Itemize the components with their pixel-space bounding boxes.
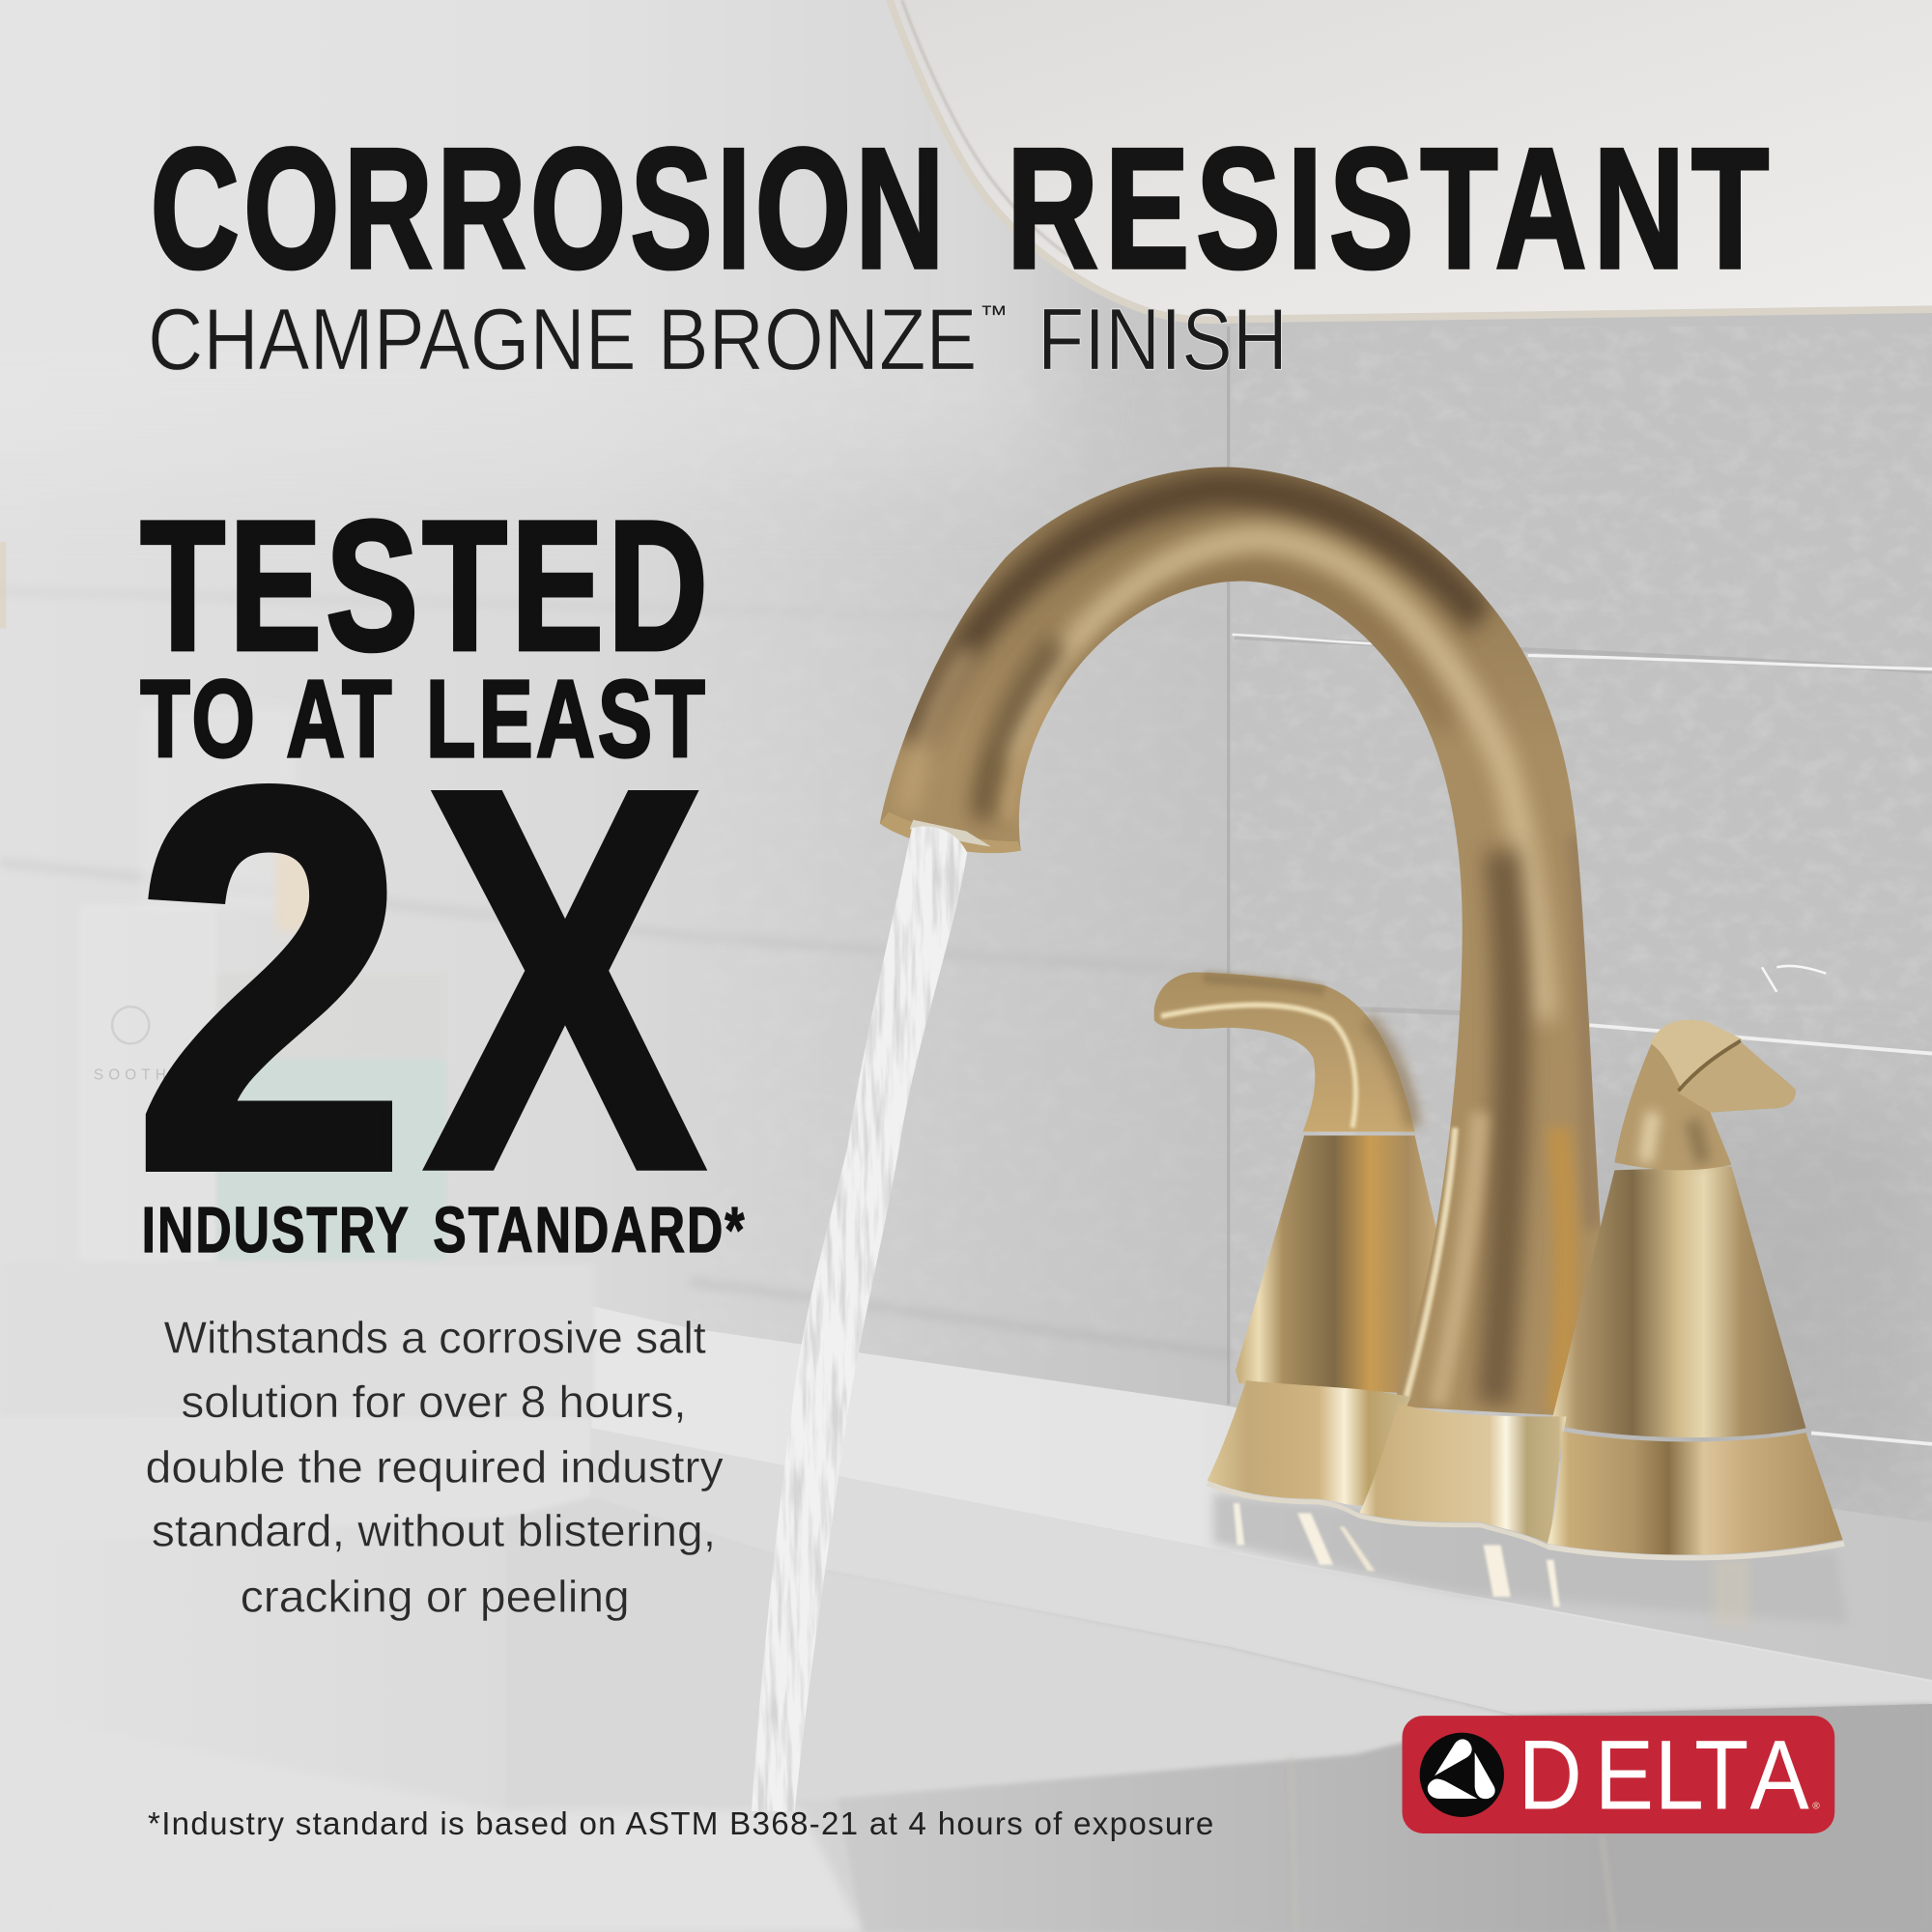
- spout and trunk: [880, 467, 1601, 1416]
- Delta logo: DELTA: [1519, 1719, 1809, 1831]
- faucet reflections on counter: [1213, 1493, 1848, 1627]
- headline: tested to at least 2X: [133, 482, 745, 1282]
- base: left escutcheon: [1208, 1380, 1410, 1505]
- subtitle: CHAMPAGNE BRONZE: [148, 292, 977, 389]
- body text: Withstands a corrosive salt: [164, 1313, 706, 1363]
- right lever handle: [1614, 1020, 1796, 1170]
- mirror: [890, 0, 1932, 320]
- Delta logo: [1403, 1716, 1834, 1833]
- left handle cone: [1236, 1135, 1436, 1394]
- footnote: *Industry standard is based on ASTM B368-21 at 4 hours of exposure: [148, 1806, 1213, 1842]
- subtitle: FINISH: [1037, 292, 1288, 389]
- body text: cracking or peeling: [241, 1571, 630, 1621]
- blurred background objects: bottles and box: SOOTH: [94, 1066, 171, 1083]
- faucet: [880, 467, 1844, 1558]
- body text: solution for over 8 hours,: [182, 1377, 686, 1427]
- water stream: [752, 826, 968, 1811]
- icon: delta triangle mark: [1420, 1733, 1504, 1817]
- body text: double the required industry: [146, 1441, 724, 1492]
- subtitle: ™: [980, 301, 1008, 328]
- counter and sink: [0, 1306, 1932, 1932]
- Delta logo: ®: [1812, 1801, 1820, 1811]
- headline: tested to at least 2X: X: [424, 675, 708, 1282]
- base: right escutcheon: [1548, 1432, 1843, 1554]
- title: [151, 112, 1769, 304]
- headline: tested to at least 2X: TESTED: [140, 482, 708, 689]
- body text: standard, without blistering,: [152, 1506, 716, 1556]
- body text: [146, 1313, 724, 1621]
- blurred background objects: bottles and box: [0, 542, 594, 1414]
- left lever handle: [1154, 972, 1415, 1131]
- title: RESISTANT: [1007, 114, 1769, 304]
- headline: tested to at least 2X: INDUSTRY STANDARD*: [142, 1194, 745, 1265]
- base: centre escutcheon: [1359, 1404, 1567, 1544]
- title: CORROSION: [151, 112, 945, 304]
- headline: tested to at least 2X: TO AT LEAST: [140, 659, 705, 781]
- headline: tested to at least 2X: 2: [133, 676, 408, 1282]
- right handle cone: [1550, 1166, 1805, 1437]
